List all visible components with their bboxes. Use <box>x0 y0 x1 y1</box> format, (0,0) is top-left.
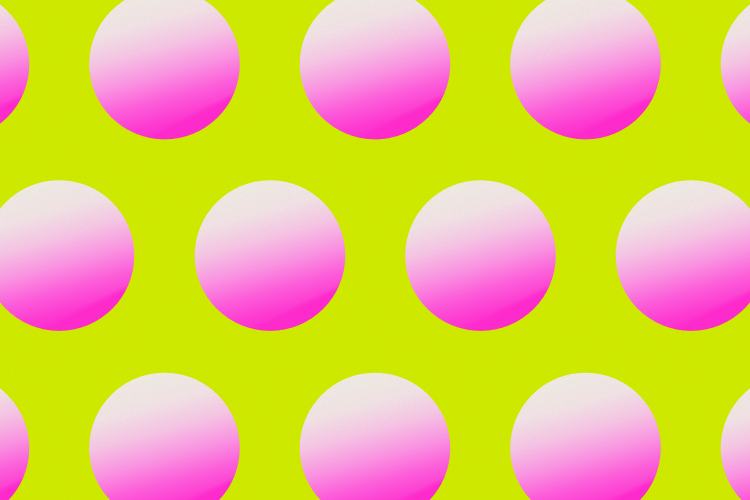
sphere: bottom row 5 <box>721 373 750 500</box>
sphere: top row 2 <box>89 0 240 139</box>
sphere: bottom row 2 <box>89 373 240 500</box>
sphere: middle row 2 <box>195 180 345 331</box>
sphere: bottom row 3 <box>300 373 450 500</box>
sphere: middle row 3 <box>405 180 556 331</box>
sphere: bottom row 1 <box>0 373 29 500</box>
row of spheres: middle <box>0 180 750 331</box>
sphere: top row 1 <box>0 0 29 139</box>
sphere: top row 5 <box>721 0 750 139</box>
row of spheres: bottom <box>0 373 750 500</box>
sphere: top row 3 <box>300 0 450 139</box>
sphere: bottom row 4 <box>510 373 661 500</box>
row of spheres: top <box>0 0 750 139</box>
sphere: top row 4 <box>510 0 661 139</box>
sphere: middle row 4 <box>616 180 750 331</box>
sphere: middle row 1 <box>0 180 134 331</box>
